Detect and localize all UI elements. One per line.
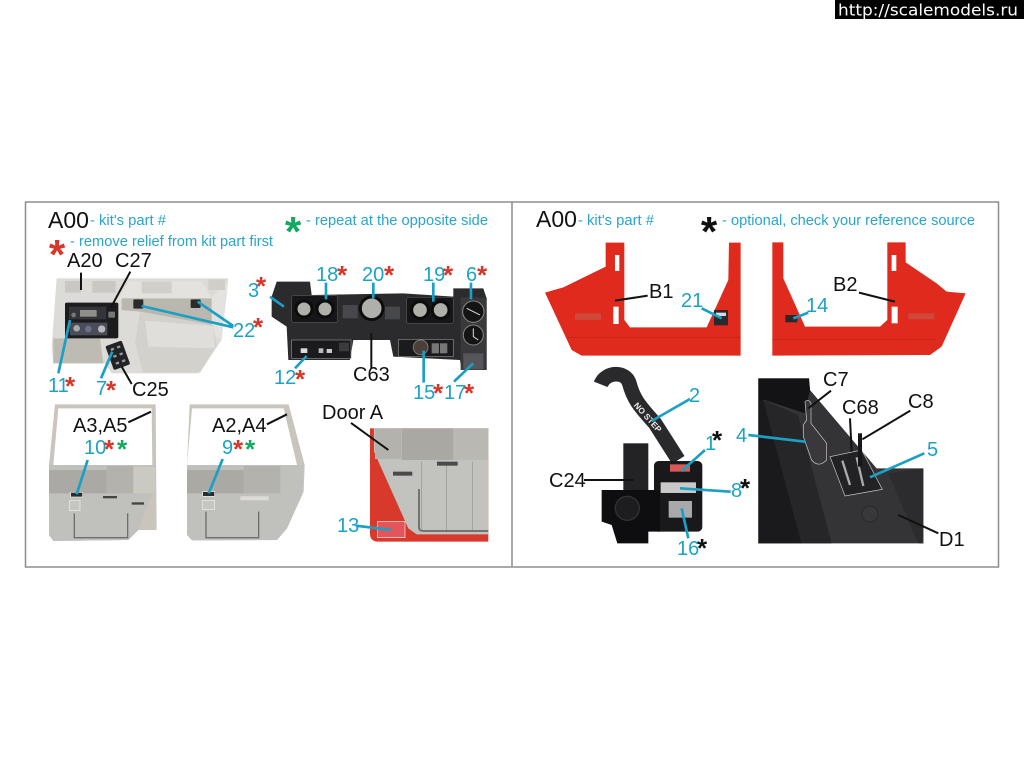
labels: left panel: C27 (115, 250, 152, 272)
asterisks: left panel: * (477, 260, 488, 290)
switch panel part 12 (292, 340, 351, 358)
panel: left header: * (49, 231, 66, 278)
labels: left panel: 7 (96, 378, 107, 400)
asterisks: left panel: * (117, 434, 128, 464)
labels: left panel: 15 (413, 382, 435, 404)
panel: right header (536, 206, 975, 255)
watermark url: http://scalemodels.ru (838, 0, 1018, 20)
door A3 A5 photo (49, 404, 157, 541)
frame (26, 202, 998, 567)
panel: right header: * (701, 208, 718, 255)
air intake photo (584, 374, 731, 543)
clock gauges part 6 (461, 297, 487, 370)
labels: intake: * (740, 473, 751, 503)
panel: left header (48, 207, 488, 278)
panel: right header: - optional, check your reference source (722, 213, 975, 229)
asterisks: left panel: * (295, 364, 306, 394)
decal 4 (803, 400, 827, 464)
labels: left panel: 6 (466, 264, 477, 286)
labels: floor detail: 4 (736, 425, 747, 447)
door A detail photo (351, 423, 488, 542)
panel: left header: - remove relief from kit part first (70, 234, 273, 250)
asterisks: left panel (65, 260, 488, 464)
asterisks: left panel: * (233, 434, 244, 464)
switch panel part 15 (399, 339, 453, 357)
labels: left panel: 11 (48, 375, 69, 397)
red door panel B1 (545, 243, 741, 356)
labels: left panel: 13 (337, 515, 359, 537)
labels: floor detail: C8 (908, 391, 934, 413)
decal 5 (830, 450, 882, 496)
labels: intake: 16 (677, 538, 699, 560)
labels: red panels: 14 (806, 295, 828, 317)
panel: left header: A00 (48, 207, 89, 233)
labels: left panel: 18 (316, 264, 338, 286)
labels: left panel (48, 250, 477, 537)
labels: left panel: 9 (222, 437, 233, 459)
labels: intake: * (697, 533, 708, 563)
labels: floor detail: D1 (939, 529, 965, 551)
panel: right header: A00 (536, 206, 577, 232)
leader lines (58, 272, 233, 384)
labels: left panel: C63 (353, 364, 390, 386)
labels: intake: 8 (731, 480, 742, 502)
panel: left header: * (285, 208, 302, 255)
vent parts 22 (133, 299, 201, 309)
decal 8 (661, 482, 696, 493)
panel: right header: - kit's part # (578, 213, 654, 229)
labels: floor detail: C7 (823, 369, 849, 391)
asterisks: left panel: * (65, 371, 76, 401)
air intake photo: NO STEP (632, 400, 664, 434)
panel: left header: - kit's part # (90, 213, 166, 229)
labels: left panel: A3,A5 (73, 415, 127, 437)
labels: intake (549, 385, 751, 563)
labels: left panel: 12 (274, 367, 296, 389)
instrument panel photo (270, 282, 487, 383)
labels: left panel: 17 (444, 382, 466, 404)
asterisks: left panel: * (253, 312, 264, 342)
gauges (296, 297, 449, 320)
decal 16 (669, 501, 692, 518)
labels: left panel: 19 (423, 264, 445, 286)
labels: left panel: 3 (248, 280, 259, 302)
leader lines (270, 283, 473, 383)
labels: red panels: B2 (833, 274, 857, 296)
labels: intake: C24 (549, 470, 586, 492)
labels: left panel: A2,A4 (212, 415, 266, 437)
labels: floor detail: C68 (842, 397, 879, 419)
labels: red panels: B1 (649, 281, 673, 303)
panel: left header: - repeat at the opposite side (306, 213, 488, 229)
door A2 A4 photo (187, 404, 305, 540)
labels: intake: * (712, 425, 723, 455)
labels: left panel: 20 (362, 264, 384, 286)
red door panel B2 (772, 242, 966, 356)
asterisks: left panel: * (443, 260, 454, 290)
asterisks: left panel: * (245, 434, 256, 464)
radio panel part 11 (65, 303, 118, 338)
labels: left panel: C25 (132, 379, 169, 401)
asterisks: left panel: * (104, 434, 115, 464)
labels: intake: 1 (705, 433, 716, 455)
asterisks: left panel: * (464, 378, 475, 408)
labels: floor detail: 5 (927, 439, 938, 461)
asterisks: left panel: * (433, 378, 444, 408)
labels: red panels (649, 274, 857, 317)
decal 1 (670, 464, 690, 472)
switch panel part 7 (105, 340, 130, 370)
labels: left panel: A20 (67, 250, 103, 272)
labels: left panel: 22 (233, 320, 255, 342)
labels: intake: 2 (689, 385, 700, 407)
labels: left panel: Door A (322, 402, 384, 424)
labels: left panel: 10 (84, 437, 106, 459)
dashboard console photo (52, 272, 233, 384)
asterisks: left panel: * (256, 271, 267, 301)
asterisks: left panel: * (337, 260, 348, 290)
labels: red panels: 21 (681, 290, 703, 312)
floor detail photo (748, 378, 938, 543)
labels: floor detail (736, 369, 965, 551)
asterisks: left panel: * (106, 375, 117, 405)
asterisks: left panel: * (384, 260, 395, 290)
